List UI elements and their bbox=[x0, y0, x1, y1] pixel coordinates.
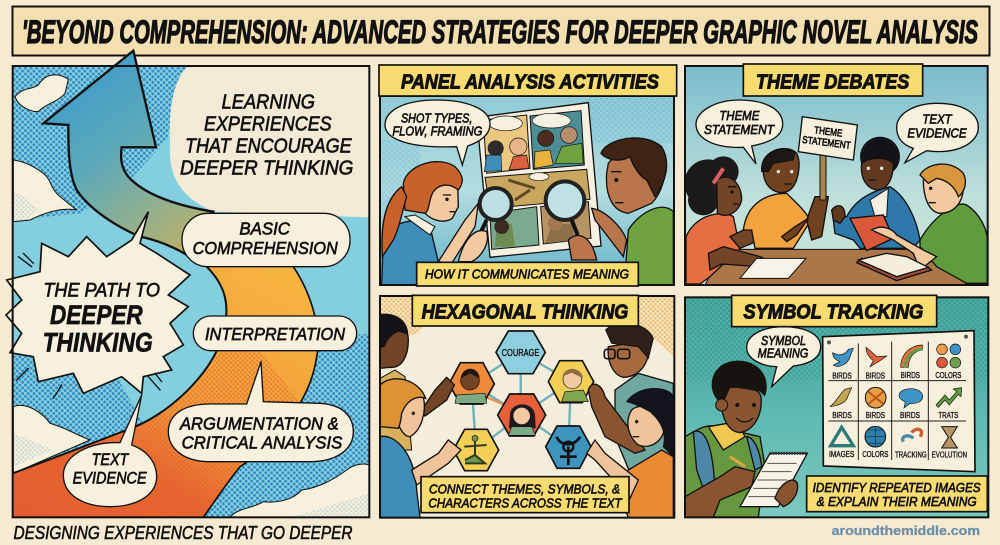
icon: perched bird bbox=[830, 388, 852, 407]
burst: the path to deeper thinking: THE PATH TO bbox=[43, 281, 160, 302]
panel heading: PANEL ANALYSIS ACTIVITIES bbox=[401, 70, 659, 93]
hexagon: character three bbox=[498, 394, 546, 436]
symbol chart: BIRDS bbox=[832, 371, 852, 380]
hexagon: character one bbox=[449, 363, 494, 404]
open book on table bbox=[857, 253, 932, 281]
symbol chart: TRATS bbox=[938, 411, 958, 420]
hexagon: symbol figure bbox=[453, 429, 499, 471]
panel: hexagonal thinking bbox=[380, 295, 674, 518]
comic page with magnifiers bbox=[477, 103, 601, 257]
panel: panel analysis activities bbox=[379, 65, 677, 286]
hexagon: courage: COURAGE bbox=[502, 348, 540, 359]
icon: speech bubble bbox=[899, 389, 923, 408]
symbol chart: EVOLUTION bbox=[932, 451, 967, 460]
panel heading bbox=[412, 295, 638, 326]
hexagon: character two bbox=[548, 361, 594, 403]
caption: IDENTIFY REPEATED IMAGES bbox=[813, 480, 981, 495]
figure: blond boy in green bbox=[872, 164, 987, 283]
speech area: learning experiences: DEEPER THINKING bbox=[180, 156, 353, 179]
bubble: text evidence bbox=[897, 103, 978, 163]
bubble: shot types, flow, framing: SHOT TYPES, bbox=[401, 112, 472, 126]
cloud: bottom right bbox=[230, 464, 369, 517]
panel: the path to deeper thinking bbox=[6, 51, 369, 517]
bubble: argumentation and critical analysis bbox=[168, 362, 353, 462]
cloud: bottom left bbox=[13, 405, 90, 473]
bubble: symbol meaning bbox=[747, 327, 821, 387]
symbol chart: COLORS bbox=[862, 450, 888, 459]
hexagon: symbol glyph bbox=[546, 426, 591, 468]
icon: colour dots bbox=[937, 344, 961, 368]
bubble: interpretation: INTERPRETATION bbox=[205, 324, 345, 344]
panel heading: THEME DEBATES bbox=[756, 70, 910, 93]
bubble: symbol meaning: MEANING bbox=[758, 347, 808, 361]
bubble: basic comprehension: COMPREHENSION bbox=[193, 238, 338, 258]
figure: boy in blue blazer with book bbox=[832, 137, 920, 251]
symbol chart: TRACKING bbox=[895, 451, 927, 460]
caption bbox=[421, 477, 629, 513]
bubble: text evidence: EVIDENCE bbox=[73, 468, 147, 487]
caption: & EXPLAIN THEIR MEANING bbox=[817, 494, 977, 509]
figure: girl with curly hair bbox=[684, 156, 783, 284]
bubble: theme statement bbox=[696, 100, 783, 164]
symbol chart: COLORS bbox=[935, 371, 961, 380]
speech area: learning experiences: EXPERIENCES bbox=[204, 113, 332, 136]
bubble: basic comprehension bbox=[182, 213, 350, 267]
bubble: theme statement: THEME bbox=[719, 109, 760, 123]
figure: boy with magnifier bbox=[568, 138, 673, 285]
hexagon network bbox=[449, 331, 594, 471]
burst: the path to deeper thinking: THINKING bbox=[43, 327, 153, 357]
speech area: learning experiences: THAT ENCOURAGE bbox=[185, 135, 352, 158]
icon: orange medallion bbox=[865, 387, 886, 408]
notebook bbox=[740, 453, 807, 507]
bubble: text evidence bbox=[63, 395, 157, 507]
watermark: aroundthemiddle.com bbox=[832, 524, 980, 538]
caption: HOW IT COMMUNICATES MEANING bbox=[425, 268, 629, 282]
sign: theme statement bbox=[798, 117, 857, 200]
bubble: text evidence: EVIDENCE bbox=[907, 126, 967, 140]
bubble: shot types, flow, framing bbox=[385, 100, 490, 165]
figure: dark haired student top left bbox=[380, 314, 454, 450]
icon: chain link bbox=[903, 429, 922, 442]
figure: student with dark hair in orange bbox=[587, 388, 673, 518]
bubble: text evidence: TEXT bbox=[922, 112, 953, 126]
bubble: theme statement: STATEMENT bbox=[704, 123, 775, 137]
symbol chart: BIRDS bbox=[866, 411, 885, 420]
table bbox=[705, 249, 967, 285]
panel: theme debates bbox=[684, 64, 988, 285]
symbol chart: BIRDS bbox=[901, 371, 920, 380]
figure: red haired student bbox=[380, 379, 461, 518]
figure: student with notebook bbox=[685, 361, 767, 517]
cloud: left middle bbox=[13, 160, 77, 222]
icon: rainbow bbox=[901, 345, 922, 367]
footer caption: DESIGNING EXPERIENCES THAT GO DEEPER bbox=[14, 522, 352, 543]
caption: CHARACTERS ACROSS THE TEXT bbox=[428, 495, 623, 510]
burst: the path to deeper thinking bbox=[6, 212, 190, 398]
bubble: text evidence: TEXT bbox=[92, 450, 130, 469]
caption: CONNECT THEMES, SYMBOLS, & bbox=[429, 481, 620, 496]
speech area: learning experiences bbox=[170, 67, 369, 217]
orange rising path bbox=[13, 267, 318, 517]
caption bbox=[417, 262, 638, 286]
panel heading bbox=[743, 64, 923, 96]
burst: the path to deeper thinking: DEEPER bbox=[50, 300, 143, 330]
figure: girl with magnifier bbox=[382, 162, 487, 285]
symbol chart: BIRDS bbox=[866, 371, 885, 380]
panel heading: HEXAGONAL THINKING bbox=[422, 300, 628, 323]
symbol chart: IMAGES bbox=[829, 450, 854, 459]
caption bbox=[807, 476, 987, 512]
arrow: rising to deeper thinking bbox=[43, 51, 213, 257]
cloud: top left bbox=[15, 75, 68, 112]
icon: rising arrow bbox=[936, 388, 962, 407]
paper on table bbox=[740, 258, 806, 278]
symbol chart bbox=[823, 331, 975, 472]
bubble: argumentation and critical analysis: ARGUMENTATION & bbox=[179, 413, 339, 433]
panel: symbol tracking bbox=[685, 295, 988, 538]
panel heading: SYMBOL TRACKING bbox=[743, 300, 923, 323]
icon: red bird bbox=[866, 347, 887, 367]
icon: hourglass bbox=[942, 427, 957, 448]
symbol chart: BIRDS bbox=[900, 411, 920, 420]
sign: theme statement: THEME bbox=[813, 125, 843, 140]
bubble: shot types, flow, framing: FLOW, FRAMING bbox=[392, 125, 482, 139]
hexagon: courage bbox=[496, 331, 545, 374]
sign: theme statement: STATEMENT bbox=[802, 135, 851, 152]
panel heading bbox=[379, 65, 677, 96]
panel heading bbox=[732, 295, 937, 327]
symbol chart: BIRDS bbox=[832, 411, 852, 420]
figure: student with glasses bbox=[588, 323, 673, 477]
bubble: interpretation bbox=[193, 316, 357, 351]
bubble: argumentation and critical analysis: CRITICAL ANALYSIS bbox=[182, 432, 342, 452]
speech area: learning experiences: LEARNING bbox=[222, 90, 315, 113]
icon: recycle triangle bbox=[831, 427, 853, 446]
icon: blue bird bbox=[833, 348, 853, 366]
bubble: symbol meaning: SYMBOL bbox=[761, 334, 806, 348]
figure: boy with sign bbox=[743, 149, 828, 248]
bubble: basic comprehension: BASIC bbox=[239, 219, 291, 239]
icon: globe bbox=[865, 426, 886, 447]
